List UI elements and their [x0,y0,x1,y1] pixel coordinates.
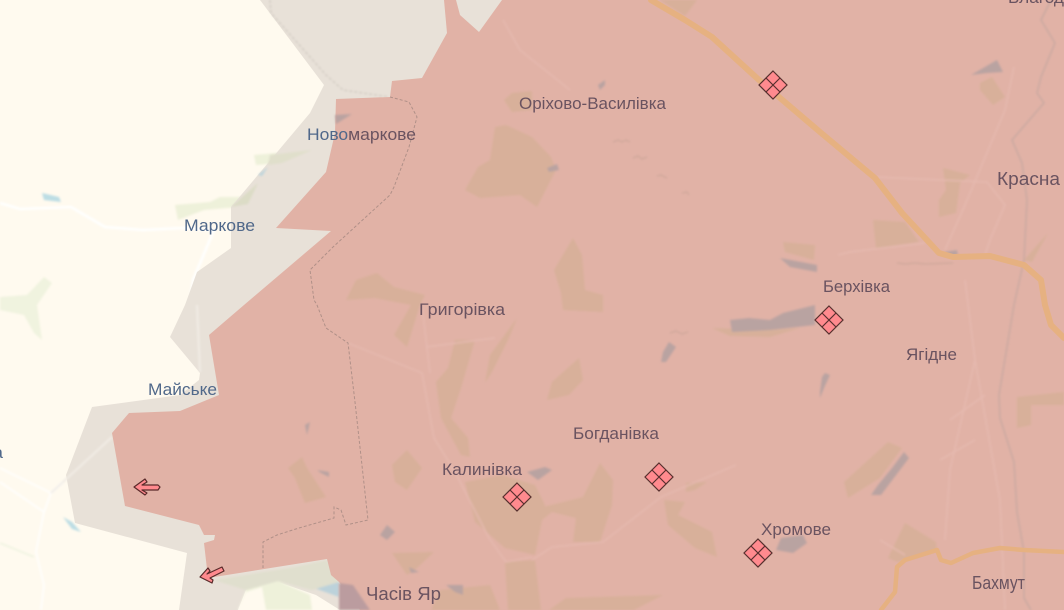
label: Krasna: Красна [997,168,1061,189]
control point: Bohdanivka [645,463,673,491]
river [999,0,1055,610]
main highway [651,0,1064,610]
arrow: west attack [134,479,160,495]
terrain west of the front [0,150,312,610]
control point: Kalynivka [503,483,531,511]
label: Chasiv Yar: Часів Яр [366,583,441,604]
label: Orikhovo-Vasylivka: Оріхово-Василівка [519,94,667,113]
old front dotted line [263,97,417,568]
lakes [305,60,1003,610]
control point: Khromove [744,539,772,567]
label: Novomarkove: Новомаркове [307,125,416,144]
label: Khromove: Хромове [761,520,831,539]
local roads [348,20,1014,610]
label: Bakhmut: Бахмут [972,572,1025,593]
label: Yahidne: Ягідне [906,345,957,364]
grey zone features [51,0,389,610]
Bakhmut road [881,548,1064,610]
small wave markers [613,140,953,334]
label: Markove: Маркове [184,216,255,235]
grey zone [66,0,510,610]
control point: north on highway [759,71,787,99]
terrain on occupied territory [288,0,1064,610]
control point: Berkhivka [815,306,843,334]
arrow: southwest attack [200,567,224,583]
label: Kalynivka: Калинівка [442,460,523,479]
label: Berkhivka: Берхівка [823,277,891,296]
forest patches [288,0,1064,610]
label: Hryhorivka: Григорівка [419,300,506,319]
label: Bohdanivka: Богданівка [573,424,660,443]
label: Maiske: Майське [148,380,217,399]
